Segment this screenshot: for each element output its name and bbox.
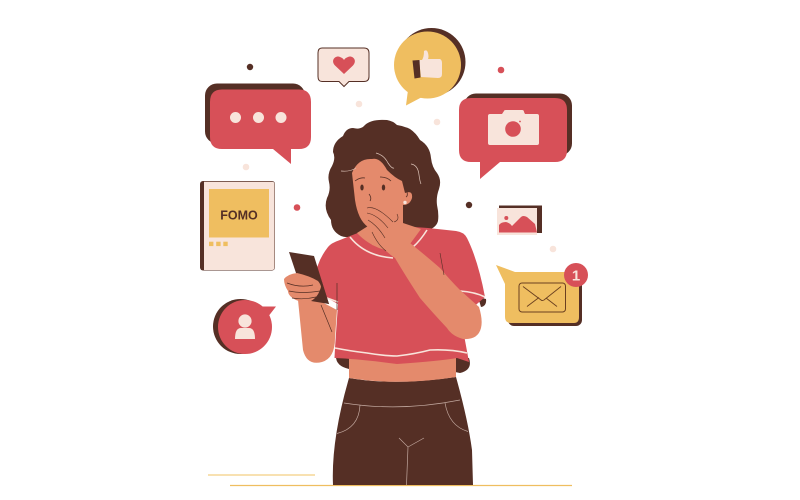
- FOMO label: FOMO: [220, 208, 258, 222]
- icon: envelope bubble with badge: [496, 263, 588, 326]
- icon: thumbs up bubble: [394, 28, 466, 106]
- left arm: [298, 300, 337, 363]
- facial features: [355, 177, 407, 204]
- midriff: [349, 355, 456, 382]
- icon: camera bubble: [459, 94, 572, 179]
- pants: [333, 377, 473, 485]
- panel: FOMO card: [200, 181, 275, 270]
- icon: envelope bubble with badge: 1: [572, 268, 580, 284]
- phone: [289, 252, 329, 304]
- neck skin: [357, 222, 421, 252]
- ground lines: [208, 475, 572, 486]
- hair: [326, 120, 440, 237]
- shirt back pieces: [336, 297, 486, 373]
- hand detail lines: [367, 208, 444, 275]
- notification badge: [564, 263, 588, 287]
- holding hand: [284, 273, 321, 301]
- phone bottom and finger lines: [311, 282, 329, 304]
- shirt: [312, 226, 485, 364]
- hair strands: [341, 153, 421, 184]
- decorative dots: [243, 64, 556, 252]
- shirt trim: [327, 230, 485, 356]
- icon: chat bubble with dots: [205, 84, 311, 164]
- icon: heart bubble: [318, 48, 369, 86]
- face and neck: [352, 159, 418, 250]
- right arm and hand: [367, 203, 482, 339]
- icon: user bubble: [213, 299, 276, 354]
- woman figure: [284, 120, 486, 485]
- icon: picture frame: [497, 206, 542, 235]
